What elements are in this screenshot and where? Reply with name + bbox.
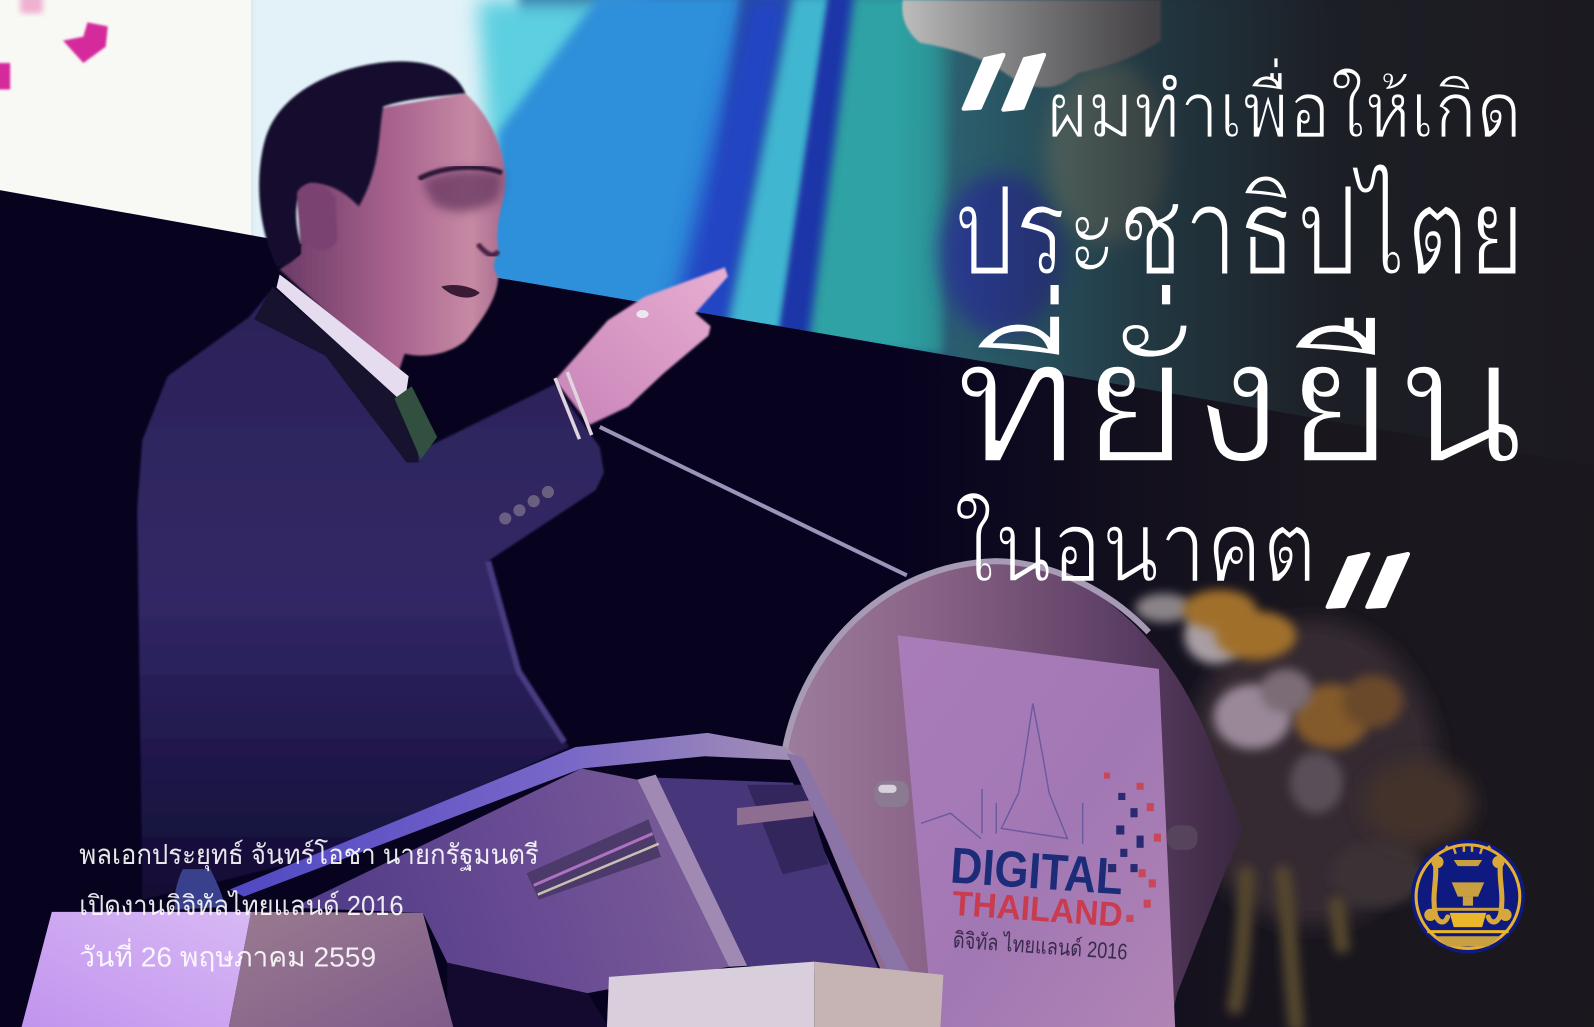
screen grey blob [902,0,1161,87]
projection screen [0,0,1346,422]
logo word digital: DIGITAL [949,836,1125,905]
desk brace [637,775,747,967]
shirt collar [277,274,409,398]
speaker [137,61,728,900]
foreground box centre [607,962,943,1027]
nose shadow [478,244,498,255]
white petals top [1136,594,1245,664]
quote line 4: ในอนาคต [954,492,1316,603]
closing quotation mark [1328,554,1408,607]
ring [636,310,649,318]
mouth [441,285,480,298]
screen deep blue stripe [671,0,793,335]
neck and face [280,94,505,378]
logo word thailand: THAILAND [951,885,1124,935]
temple skyline icon [921,703,1083,844]
seal lions [1434,864,1502,922]
rear dark gap [747,785,829,874]
caption name: พลเอกประยุทธ์ จันทร์โอชา นายกรัฐมนตรี [79,839,539,872]
seal lion heads and paws [1424,856,1512,921]
quote line 3: ที่ยั่งยืน [954,283,1525,501]
bracelets [555,372,592,439]
screen pale panel [244,0,518,285]
logo thai subtitle: ดิจิทัล ไทยแลนด์ 2016 [952,927,1128,965]
screen navy stripe [778,0,859,346]
seal base [1427,913,1509,946]
caption event: เปิดงานดิจิทัลไทยแลนด์ 2016 [79,890,404,921]
soft foliage base [1184,620,1438,925]
side bracket [787,753,912,982]
quote line 1: ผมทำเพื่อให้เกิด [1047,57,1522,154]
pale orchids [1214,669,1424,907]
opening quotation mark [964,55,1044,110]
eyebrow [419,167,502,179]
logo dot swarm [1104,773,1161,922]
quote block [954,55,1525,607]
foreground box left [21,912,453,1027]
bracket bolts [874,781,1198,850]
water bottle [175,869,226,910]
lectern desk [230,733,912,1027]
screen cyan stripe [727,0,834,341]
caption date: วันที่ 26 พฤษภาคม 2559 [79,939,376,973]
shelf recess [527,819,661,900]
sloped underside [293,768,729,993]
lectern round back panel [785,561,1242,1027]
orange blossoms [1183,590,1403,749]
screen pink marks [0,22,108,89]
screen white panel [0,0,251,249]
lapel [254,287,419,463]
suit jacket [137,293,604,900]
quote text lines [954,57,1525,603]
desk top edge [230,733,799,897]
flower arrangement [1136,590,1474,1025]
eye shadow and brow [422,170,503,212]
screen teal panel [808,0,961,356]
rod [737,800,813,825]
dim peach blossoms [1362,760,1474,846]
sign board [898,635,1175,1027]
sleeve buttons [499,486,554,525]
digital thailand logo [921,703,1161,965]
ear [297,184,338,251]
tie [394,386,437,459]
screen blue panel [478,0,742,325]
seal urn and pedestal [1435,860,1500,911]
rear cavity [656,778,882,978]
under-desk shadow [447,963,609,1027]
government seal [1411,840,1525,954]
dark overlay on right side [895,0,1594,1027]
fern fronds [1235,874,1342,1025]
screen dim right part [936,0,1233,404]
caption block [79,839,539,973]
screen cyan corner [464,0,625,148]
seal flames [1444,846,1492,854]
raised hand [555,267,728,425]
microphone stem [600,427,907,575]
hair [259,61,466,266]
sleeve fold [488,561,564,742]
